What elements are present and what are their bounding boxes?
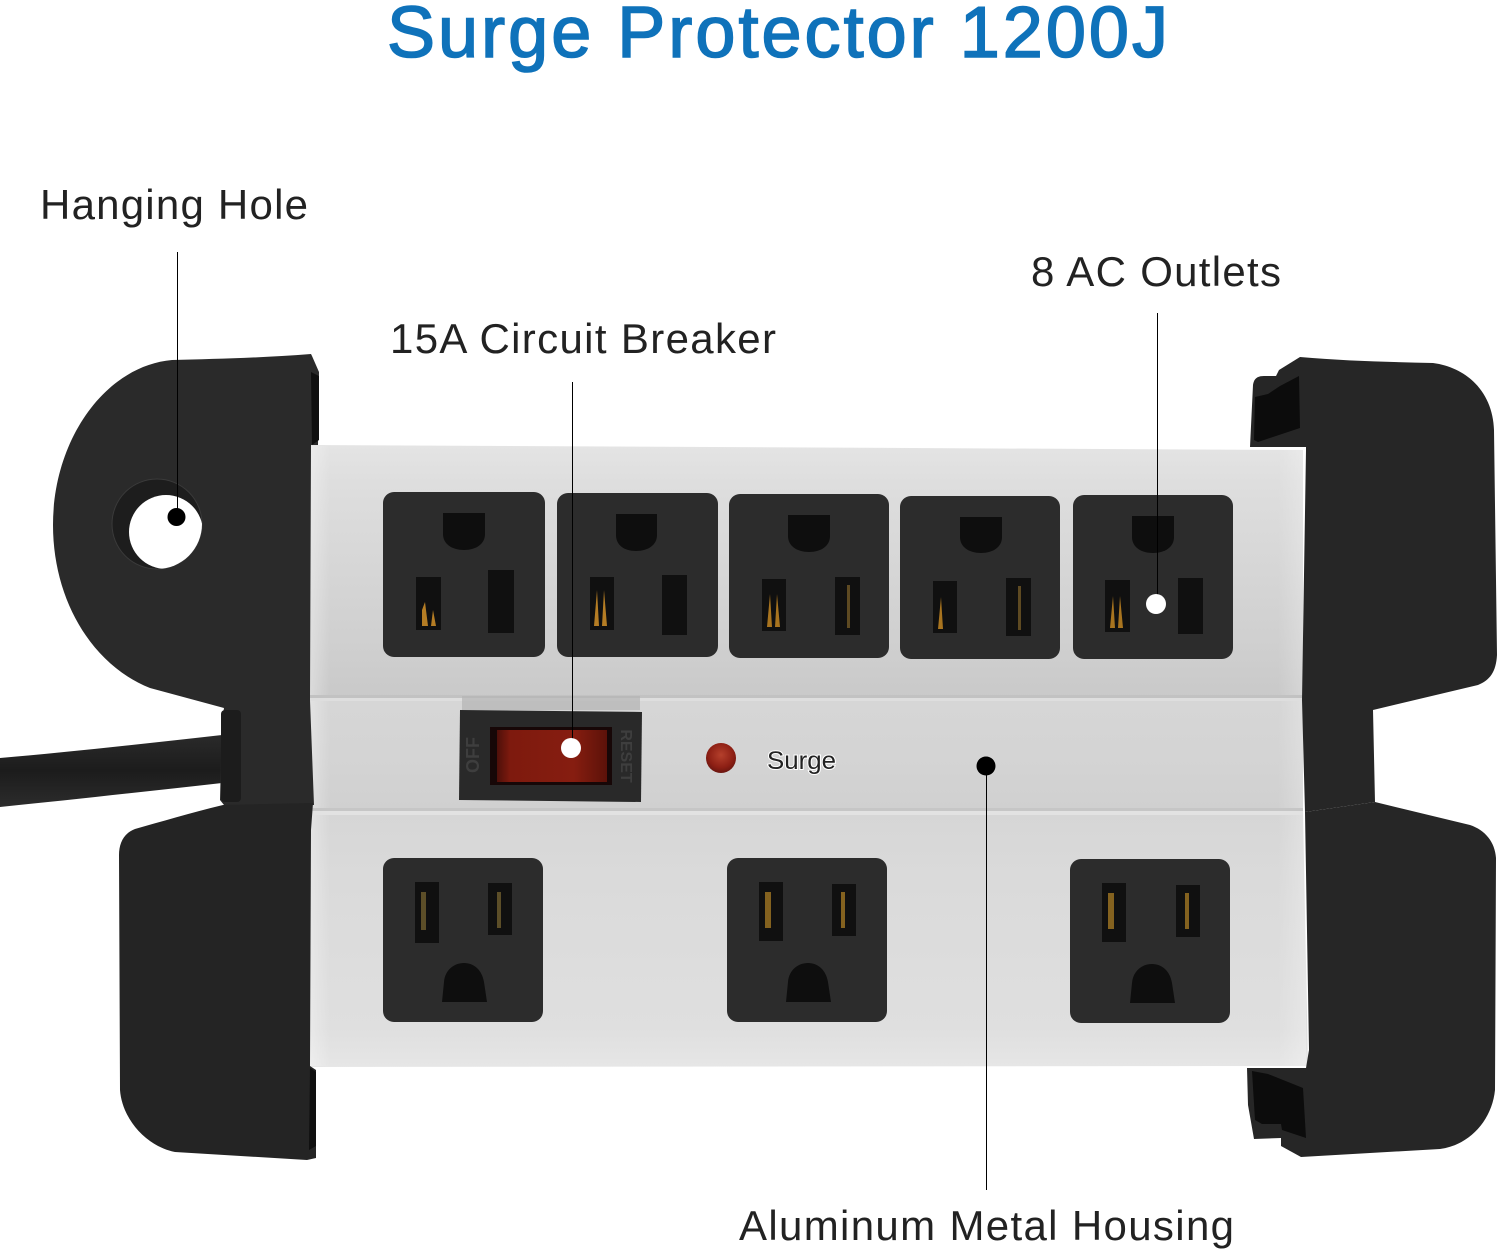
mounting channel — [1254, 376, 1300, 442]
label: Hanging Hole: Hanging Hole — [40, 181, 308, 228]
circuit breaker switch — [459, 696, 642, 802]
strain relief neck — [221, 710, 241, 802]
mounting channel — [1252, 1071, 1306, 1138]
leader: hanging hole — [168, 252, 186, 526]
outlet 5 — [1073, 495, 1233, 659]
label: 15A Circuit Breaker: 15A Circuit Breaker — [390, 315, 776, 362]
housing bottom panel — [305, 812, 1308, 1067]
mounting channel — [311, 372, 319, 445]
top row outlets — [383, 492, 1233, 659]
outlet 7 — [727, 858, 887, 1022]
housing middle panel — [305, 698, 1303, 812]
OFF marking: OFF — [463, 737, 483, 773]
red rocker — [490, 727, 612, 785]
right upper end cap — [1250, 357, 1497, 812]
surge indicator LED — [706, 743, 736, 773]
power cord — [0, 735, 222, 807]
mounting channel — [309, 1068, 316, 1150]
leader: aluminum housing — [976, 756, 996, 1190]
outlet 4 — [900, 496, 1060, 659]
bottom row outlets — [383, 858, 1230, 1023]
leader: circuit breaker — [561, 382, 581, 758]
label: 8 AC Outlets: 8 AC Outlets — [1031, 248, 1281, 295]
aluminum housing — [305, 445, 1308, 1067]
RESET marking: RESET — [617, 729, 634, 783]
switch bezel — [459, 710, 642, 802]
outlet 6 — [383, 858, 543, 1022]
outlet 3 — [729, 494, 889, 658]
left lower end cap — [119, 803, 316, 1160]
label: Aluminum Metal Housing: Aluminum Metal Housing — [739, 1202, 1234, 1249]
surge text: Surge — [767, 747, 836, 775]
right lower end cap — [1247, 802, 1496, 1157]
outlet 2 — [557, 493, 718, 657]
leader: AC outlets — [1146, 313, 1166, 614]
outlet 1 — [383, 492, 545, 657]
outlet 8 — [1070, 859, 1230, 1023]
left upper end cap with hanging hole — [53, 354, 319, 805]
hanging hole — [112, 479, 203, 569]
housing top panel — [305, 445, 1303, 698]
